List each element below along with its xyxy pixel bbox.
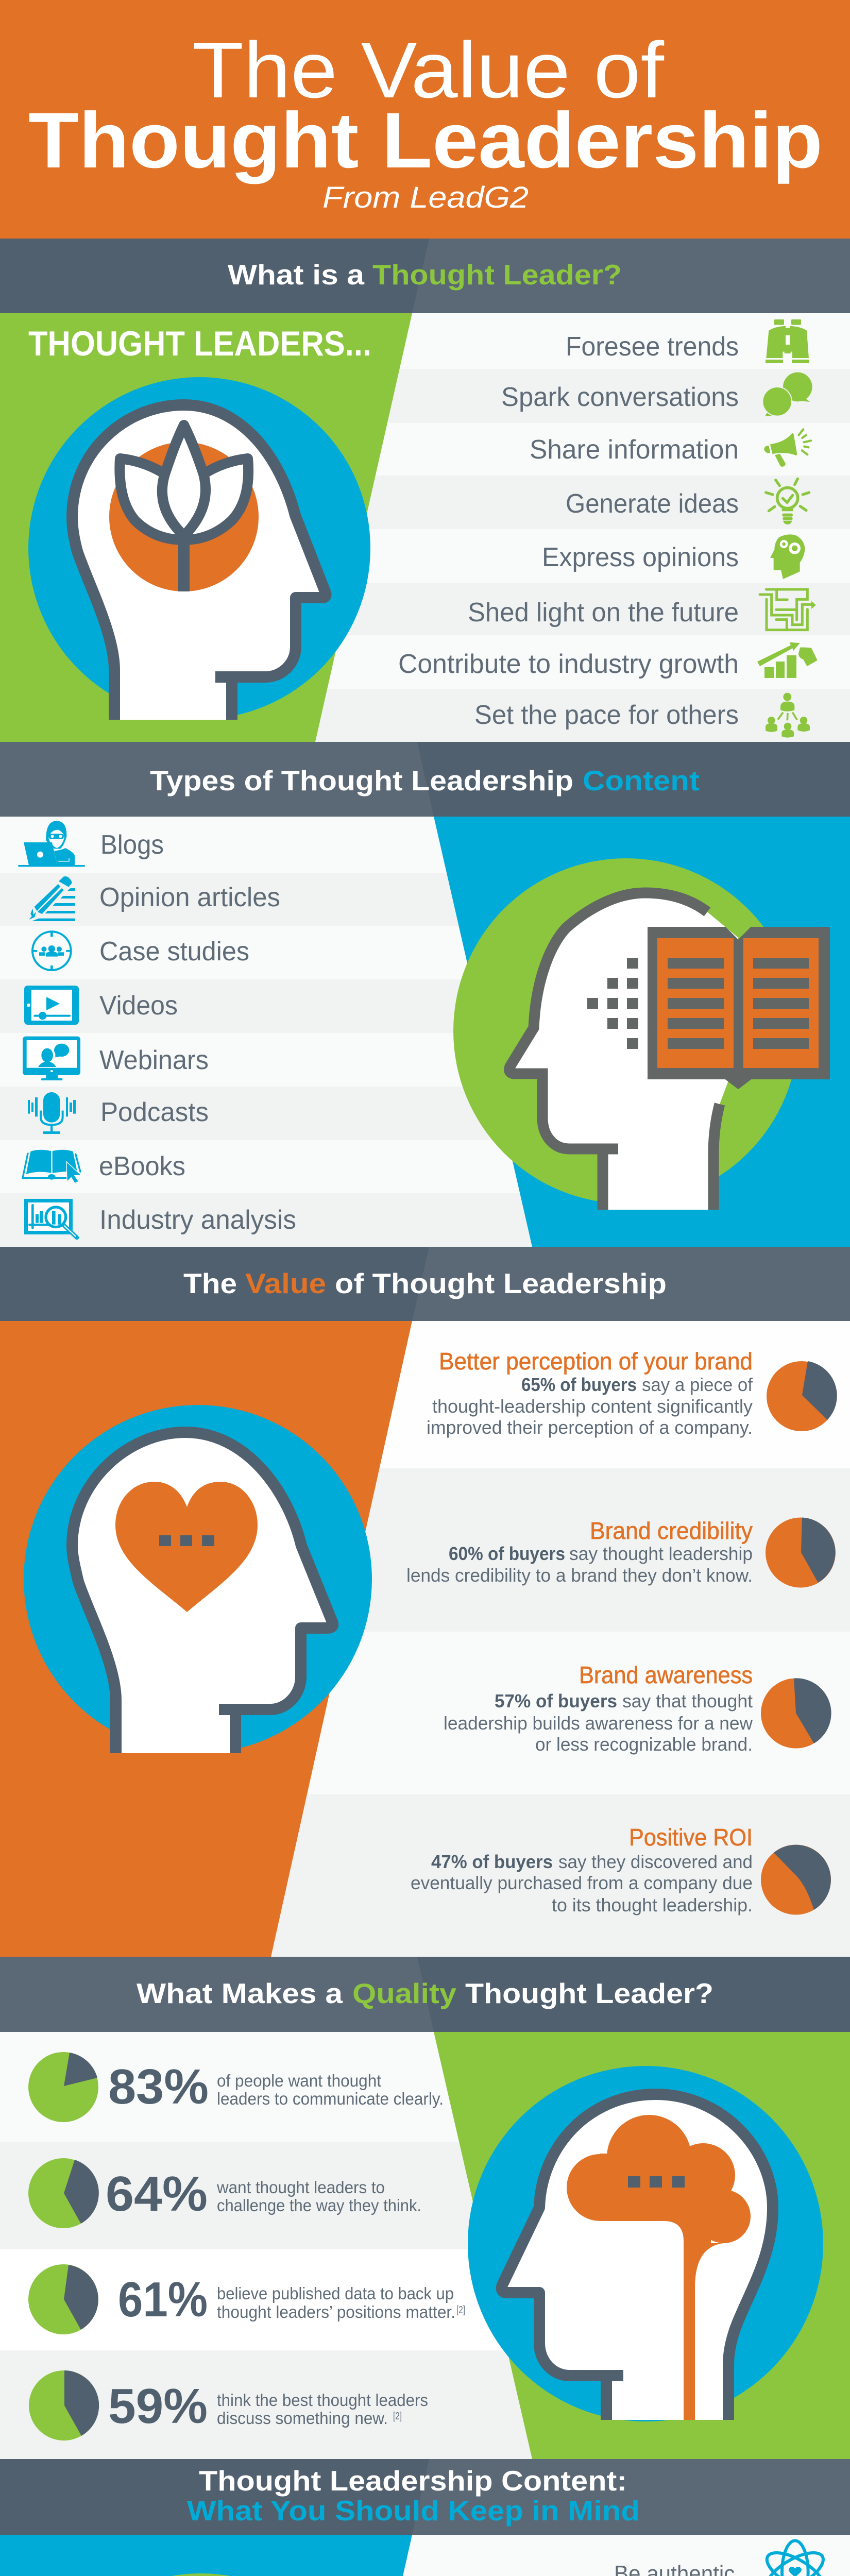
- heading band: What Makes a Quality Thought Leader: Thought Leader?: [465, 1977, 713, 2009]
- panel: what is a thought leader: [0, 313, 850, 742]
- icons: green trait icons lower: [757, 534, 818, 738]
- icons: blue content icons upper: [19, 821, 84, 1025]
- stat: brand credibility: 60% of buyers: [449, 1543, 565, 1564]
- stat: 83 percent: of people want thought: [217, 2071, 381, 2090]
- stat: brand awareness: [444, 1662, 831, 1755]
- heading band: The Value of Thought Leadership: of Thought Leadership: [335, 1267, 667, 1299]
- stat: 59 percent: 59%: [108, 2379, 208, 2434]
- list: thought leader traits: Set the pace for others: [474, 700, 739, 730]
- stat: brand credibility: lends credibility to a brand they don’t know.: [406, 1565, 753, 1586]
- panel: types of content: [0, 817, 850, 1247]
- illustration: head with tree: [468, 2066, 823, 2421]
- stat: 64 percent: want thought leaders to: [216, 2178, 385, 2197]
- list: content types: eBooks: [99, 1151, 185, 1181]
- stat: 61 percent: [2]: [456, 2304, 465, 2316]
- stat: 64 percent: 64%: [106, 2166, 208, 2222]
- illustration: head with arrow loop: [30, 2573, 372, 2576]
- heading band: Types of Thought Leadership Content: [0, 742, 850, 817]
- stat: better perception: thought-leadership content significantly: [432, 1396, 753, 1417]
- list: content types: [99, 830, 296, 1235]
- heading band: What is a Thought Leader: Thought Leader?: [372, 259, 622, 291]
- panel: header: [0, 0, 850, 239]
- heading band: Thought Leadership Content: What You Should Keep in Mind: [187, 2495, 640, 2527]
- stat: 61 percent: [28, 2264, 465, 2334]
- title line two: Thought Leadership: [28, 96, 823, 184]
- list: content types: Opinion articles: [99, 883, 280, 912]
- heading band: The Value of Thought Leadership: Value: [245, 1267, 326, 1299]
- illustration: head with heart: [24, 1405, 372, 1753]
- stat: brand credibility: [406, 1517, 836, 1588]
- list: content types: Videos: [99, 991, 178, 1021]
- heading band: The Value of Thought Leadership: [0, 1247, 850, 1321]
- list: thought leader traits: Generate ideas: [566, 489, 739, 519]
- stat: brand awareness: 57% of buyers: [495, 1690, 617, 1711]
- stat: brand credibility: say thought leadership: [569, 1543, 753, 1564]
- heading band: What is a Thought Leader: [0, 239, 850, 313]
- list: thought leader traits: Contribute to industry growth: [398, 649, 739, 679]
- stat: 61 percent: 61%: [118, 2272, 208, 2327]
- list: content types: Blogs: [100, 830, 164, 860]
- stat: 59 percent: [2]: [393, 2411, 402, 2422]
- subtitle: From LeadG2: [322, 181, 529, 214]
- list: content types: Industry analysis: [99, 1205, 296, 1235]
- heading band: What Makes a Quality Thought Leader: What Makes a: [137, 1977, 343, 2009]
- stat: 64 percent: challenge the way they think.: [217, 2196, 421, 2215]
- stat: brand awareness: say that thought: [622, 1690, 753, 1711]
- stat: better perception: [427, 1348, 837, 1438]
- heading band: Types of Thought Leadership Content: Types of Thought Leadership: [150, 765, 573, 796]
- stat: brand credibility: Brand credibility: [590, 1517, 753, 1544]
- stat: positive ROI: Positive ROI: [629, 1824, 753, 1851]
- stat: positive ROI: [411, 1824, 831, 1916]
- stat: 83 percent: [28, 2052, 444, 2122]
- label: thought leaders: THOUGHT LEADERS...: [28, 324, 371, 363]
- heading band: Thought Leadership Content: Thought Leadership Content:: [199, 2465, 627, 2497]
- panel: what to keep in mind: [0, 2535, 850, 2576]
- list: thought leader traits: Express opinions: [542, 543, 739, 572]
- stat: 61 percent: believe published data to back up: [217, 2284, 454, 2303]
- stat: better perception: Better perception of your brand: [439, 1348, 753, 1375]
- stat: brand awareness: leadership builds awareness for a new: [444, 1713, 753, 1734]
- stat: 61 percent: thought leaders’ positions matter.: [217, 2302, 455, 2321]
- illustration: head with open book: [453, 858, 829, 1210]
- stat: 83 percent: leaders to communicate clearly.: [217, 2089, 444, 2108]
- list: thought leader traits: Share information: [530, 435, 739, 465]
- list: content types: Case studies: [99, 937, 249, 967]
- stat: better perception: improved their perception of a company.: [427, 1417, 753, 1438]
- stat: positive ROI: eventually purchased from a company due: [411, 1872, 753, 1893]
- list: thought leader traits: Shed light on the future: [468, 598, 739, 628]
- list: content types: Webinars: [99, 1045, 209, 1075]
- illustration: head with lotus: [28, 377, 370, 720]
- stat: 59 percent: [29, 2370, 428, 2441]
- icons: atom, head and person: [761, 2540, 829, 2576]
- list: content types: Podcasts: [100, 1097, 209, 1127]
- panel: value of thought leadership: [0, 1321, 850, 1957]
- heading band: The Value of Thought Leadership: The: [183, 1267, 237, 1299]
- list: thought leader traits: [398, 332, 739, 730]
- heading band: Thought Leadership Content: [0, 2459, 850, 2535]
- heading band: What Makes a Quality Thought Leader: Quality: [352, 1977, 456, 2009]
- stat: positive ROI: to its thought leadership.: [552, 1894, 753, 1916]
- stat: 59 percent: discuss something new.: [217, 2409, 388, 2428]
- stat: brand awareness: or less recognizable brand.: [535, 1734, 753, 1755]
- icons: blue content icons lower: [23, 1037, 81, 1238]
- list: thought leader traits: Spark conversations: [501, 382, 739, 412]
- stat: 83 percent: 83%: [108, 2059, 209, 2114]
- stat: better perception: 65% of buyers: [521, 1374, 637, 1395]
- icons: green trait icons upper: [762, 319, 812, 524]
- stat: brand awareness: Brand awareness: [579, 1662, 753, 1688]
- stat: positive ROI: say they discovered and: [558, 1851, 753, 1872]
- stat: 59 percent: think the best thought leaders: [217, 2391, 428, 2410]
- heading band: What Makes a Quality Thought Leader: [0, 1957, 850, 2032]
- stat: 64 percent: [28, 2158, 421, 2228]
- heading band: Types of Thought Leadership Content: Content: [583, 765, 700, 796]
- list: thought leader traits: Foresee trends: [566, 332, 739, 362]
- stat: positive ROI: 47% of buyers: [431, 1851, 553, 1872]
- heading band: What is a Thought Leader: What is a: [228, 259, 364, 291]
- stat: better perception: say a piece of: [642, 1374, 753, 1395]
- title line one: The Value of: [192, 26, 665, 114]
- panel: quality thought leader: [0, 2032, 850, 2459]
